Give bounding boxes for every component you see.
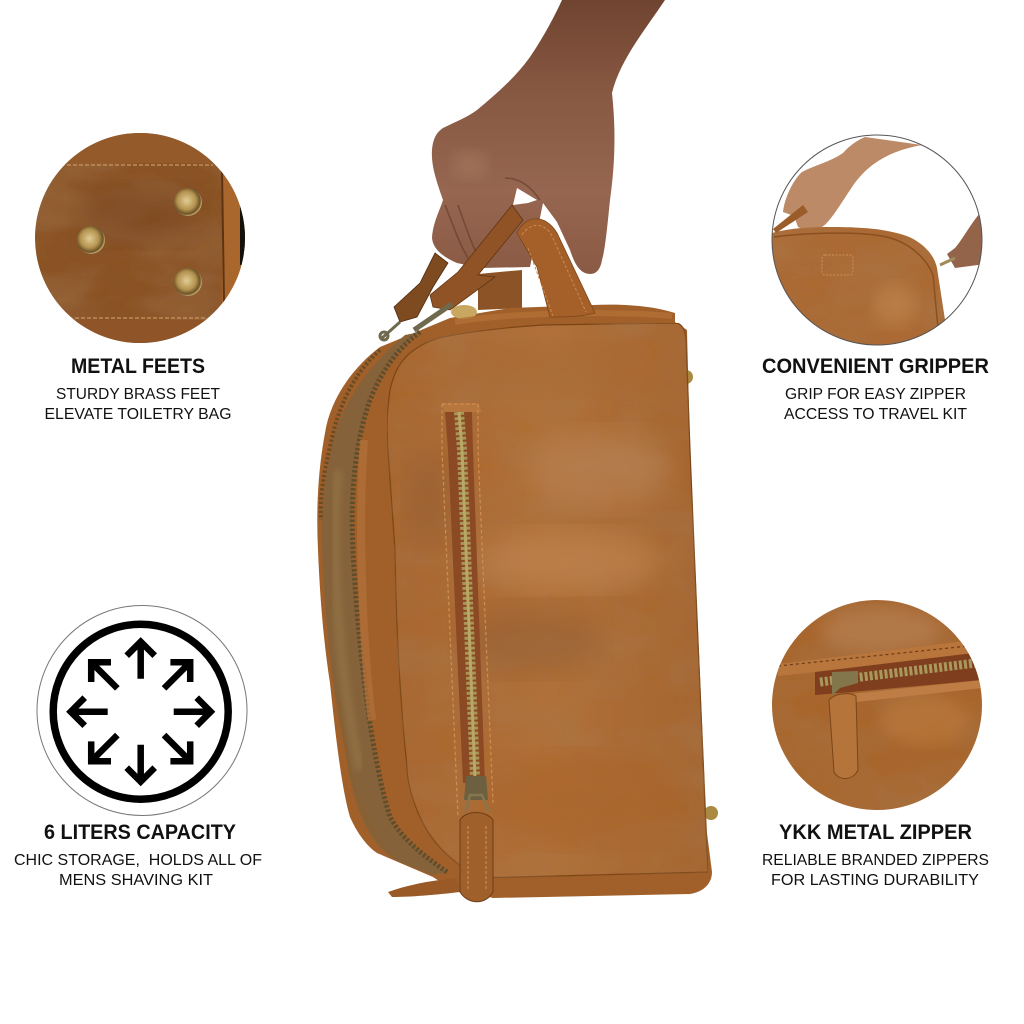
rear strap bbox=[394, 253, 448, 322]
description: MENS SHAVING KIT bbox=[59, 872, 213, 889]
front pocket zipper bbox=[442, 403, 493, 902]
left arm and hand bbox=[783, 137, 922, 229]
front strap bbox=[430, 205, 523, 310]
description: RELIABLE BRANDED ZIPPERS bbox=[762, 852, 989, 869]
bag main face bbox=[387, 323, 708, 878]
leather mottling bbox=[405, 345, 680, 845]
brass ball behind strap bbox=[451, 305, 477, 319]
heading: 6 LITERS CAPACITY bbox=[44, 821, 236, 844]
photo: zipper close-up bbox=[772, 600, 982, 810]
panel: YKK zipper bbox=[762, 600, 989, 889]
photo: brass feet on leather bbox=[35, 133, 246, 344]
description bbox=[784, 386, 967, 423]
description: CHIC STORAGE, HOLDS ALL OF bbox=[14, 852, 262, 869]
right hand bbox=[947, 215, 982, 268]
handle stitches bbox=[522, 225, 586, 316]
gap in fist bbox=[513, 188, 537, 205]
rear brass feet on back edge bbox=[679, 370, 718, 820]
icon: expanding arrows in circle bbox=[37, 606, 247, 816]
zipper pull tab bbox=[460, 812, 493, 902]
panel: capacity bbox=[14, 606, 262, 889]
panel: convenient gripper bbox=[762, 135, 989, 423]
description: ELEVATE TOILETRY BAG bbox=[44, 406, 232, 423]
central product photo: hand holding leather bag bbox=[317, 0, 718, 902]
main handle bbox=[517, 219, 595, 317]
photo: hands opening zipper bbox=[772, 135, 985, 350]
description: FOR LASTING DURABILITY bbox=[771, 872, 979, 889]
description: ACCESS TO TRAVEL KIT bbox=[784, 406, 967, 423]
knuckle highlights bbox=[452, 151, 488, 179]
circle outline bbox=[772, 135, 982, 345]
description: STURDY BRASS FEET bbox=[56, 386, 220, 403]
gusset zippers and seams bbox=[321, 332, 447, 872]
description bbox=[44, 386, 232, 423]
heading: CONVENIENT GRIPPER bbox=[762, 355, 989, 378]
rear handle bbox=[478, 270, 522, 310]
hand and arm bbox=[432, 0, 665, 274]
panel: metal feet bbox=[35, 133, 246, 423]
bag panel bbox=[772, 227, 945, 350]
bag back lip and silhouette bbox=[317, 305, 712, 898]
zipper sliders bbox=[380, 304, 452, 340]
heading: METAL FEETS bbox=[71, 355, 205, 378]
zipper slider bbox=[464, 776, 489, 812]
gusset shading bbox=[335, 470, 360, 770]
zipper pull tab bbox=[829, 694, 858, 778]
bottom tab bbox=[388, 878, 460, 897]
top lip highlight bbox=[455, 313, 672, 322]
description bbox=[762, 852, 989, 889]
description bbox=[14, 852, 262, 889]
heading: YKK METAL ZIPPER bbox=[779, 821, 972, 844]
description: GRIP FOR EASY ZIPPER bbox=[785, 386, 966, 403]
bag gusset side bbox=[322, 332, 447, 875]
